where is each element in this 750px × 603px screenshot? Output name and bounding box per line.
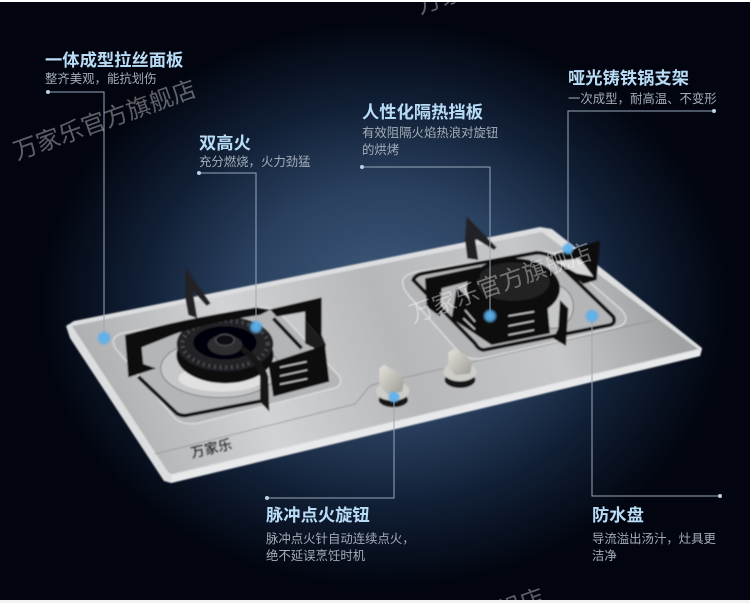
stove plate surface (72, 232, 698, 474)
description: 一次成型，耐高温、不变形 (568, 91, 717, 106)
leader line (265, 390, 401, 500)
grate left arm (425, 267, 480, 317)
callout: ignition knob (265, 390, 415, 563)
right burner (376, 217, 626, 407)
description: 导流溢出汤汁，灶具更 (592, 532, 716, 546)
grate right arm (553, 241, 600, 284)
description: 有效阻隔火焰热浪对旋钮 (362, 126, 498, 140)
watermark: top left: 万家乐官方旗舰店 (10, 76, 200, 166)
recess (113, 307, 341, 424)
right knob (443, 349, 477, 388)
callout: dual flame (197, 133, 311, 335)
description: 脉冲点火针自动连续点火， (266, 532, 415, 546)
leader line (561, 109, 716, 256)
grate back prong (185, 267, 211, 318)
grate basket (268, 345, 329, 397)
grate front arm (553, 300, 568, 346)
description: 的烘烤 (362, 142, 399, 157)
description: 整齐美观，能抗划伤 (45, 71, 157, 86)
left knob (376, 365, 409, 407)
callout: panel (45, 50, 183, 346)
burner cap (208, 335, 242, 355)
basket slots (280, 362, 307, 384)
watermark: centre: 万家乐官方旗舰店 (406, 239, 596, 329)
grate basket (452, 287, 550, 345)
grate frame (413, 253, 614, 350)
silver base (533, 285, 573, 328)
control recess line (155, 320, 655, 454)
leader line (46, 90, 112, 346)
stove plate edge (66, 227, 702, 483)
callout: pot support (561, 68, 717, 256)
grate frame (138, 318, 302, 416)
recess (403, 251, 626, 359)
heading: 防水盘 (592, 505, 644, 525)
left burner (113, 267, 341, 424)
grate left arm (125, 307, 270, 377)
leader line (197, 171, 264, 335)
description: 绝不延误烹饪时机 (266, 548, 366, 563)
grate back prong (465, 217, 497, 260)
burner body (467, 258, 560, 318)
grate right arm (270, 297, 326, 345)
callout: heat shield (360, 102, 498, 324)
basket slots (463, 310, 534, 335)
description: 充分燃烧，火力劲猛 (199, 154, 311, 169)
grate front arm (242, 345, 269, 412)
stove front edge (171, 349, 702, 483)
heading: 哑光铸铁锅支架 (568, 68, 689, 88)
leader line (360, 165, 498, 324)
heading: 人性化隔热挡板 (362, 102, 483, 122)
heading: 脉冲点火旋钮 (266, 505, 370, 525)
callout: water tray (584, 308, 722, 563)
burner body (176, 327, 274, 383)
heading: 一体成型拉丝面板 (45, 50, 183, 70)
heading: 双高火 (199, 133, 251, 153)
stove (66, 217, 702, 483)
description: 洁净 (592, 549, 617, 563)
brand logo: 万家乐 (189, 436, 234, 461)
burner base (161, 339, 279, 398)
leader line (584, 308, 722, 498)
